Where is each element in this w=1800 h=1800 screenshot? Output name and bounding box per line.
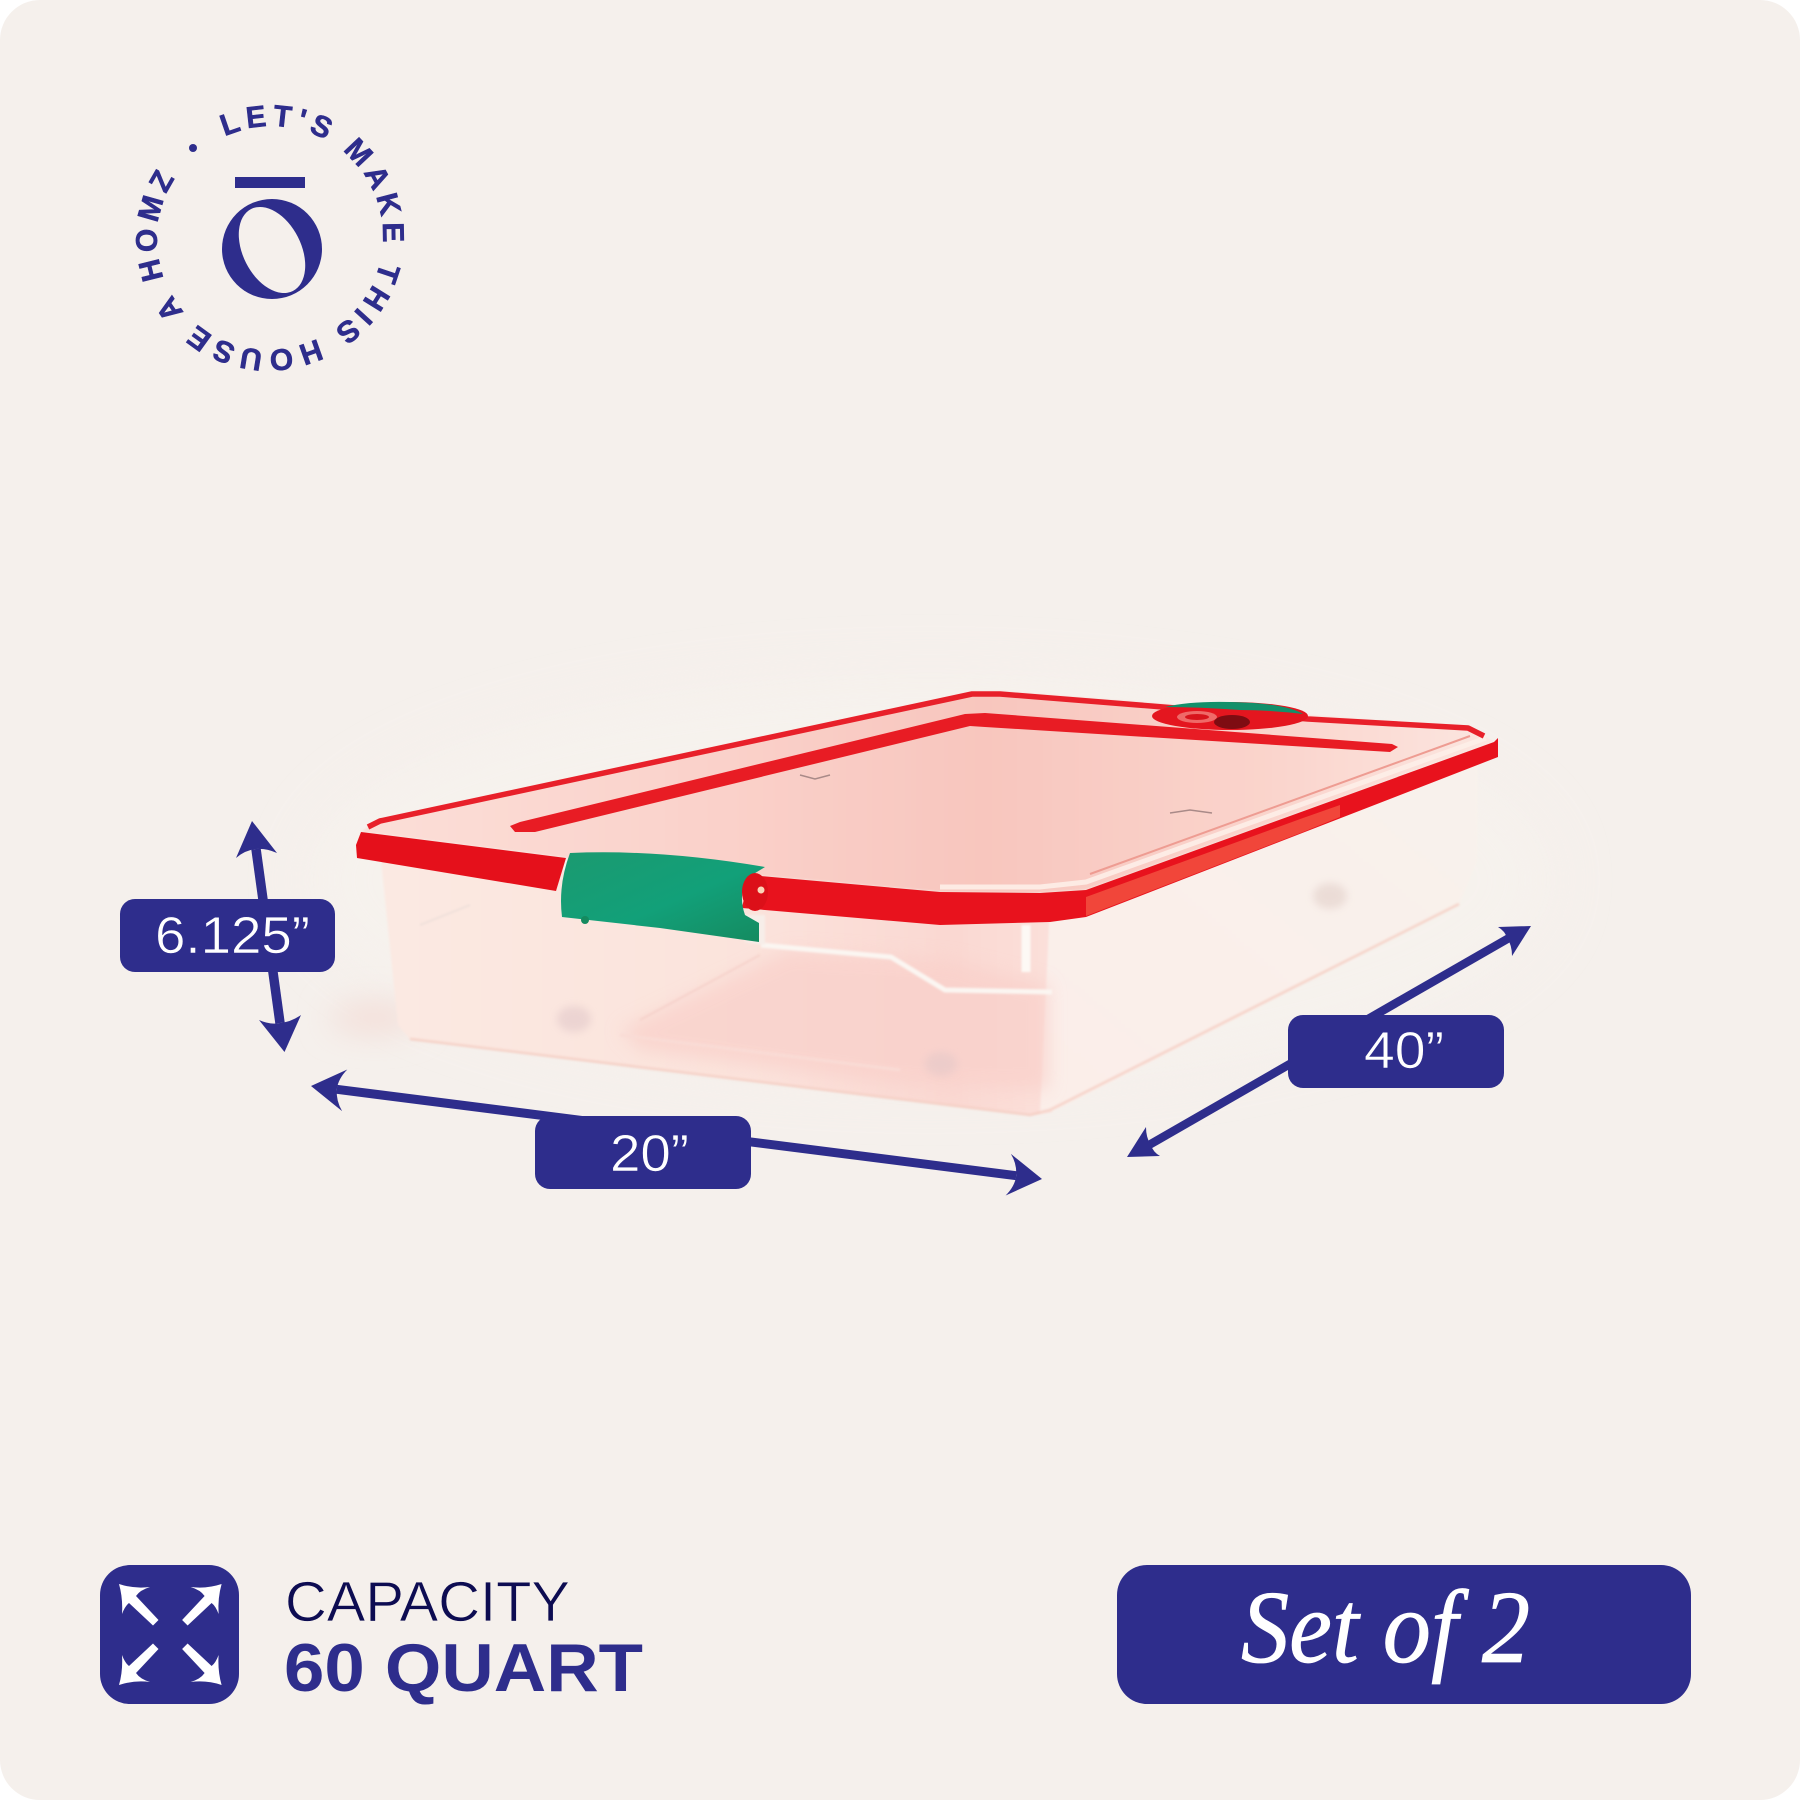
height label: [120, 899, 335, 972]
icon: expand arrows: [100, 1565, 239, 1704]
lid inner thin line: [1090, 736, 1470, 874]
dimension: height 6.125: [120, 821, 335, 1052]
height arrow: [236, 821, 301, 1052]
width label: [535, 1116, 751, 1189]
tub pink reflections: [420, 883, 1347, 1090]
logo: circular slogan: LET'S MAKE THIS HOUSE A HOMZ: [136, 104, 404, 371]
lid inner groove: [510, 713, 1398, 832]
lid knob: [1152, 702, 1308, 730]
depth arrow: [1127, 926, 1531, 1157]
width label: 20”: [610, 1125, 689, 1183]
product photo: storage box: [310, 680, 1550, 1115]
rim highlight: [1086, 805, 1340, 916]
set of 2 badge: Set of 2: [1241, 1570, 1530, 1685]
logo badge: [136, 104, 404, 371]
capacity value: 60 QUART: [284, 1630, 643, 1706]
logo: o with macron mark: [222, 177, 322, 304]
tub bottom edge: [410, 904, 1459, 1115]
set of 2 badge: [1117, 1565, 1691, 1704]
width arrow: [311, 1070, 1042, 1196]
soft halo and shadow: [310, 680, 1550, 1080]
dimension: depth 40: [1127, 926, 1531, 1157]
lid small marks: [800, 775, 1212, 813]
depth label: 40”: [1364, 1022, 1444, 1080]
dimension: width 20: [311, 1070, 1042, 1196]
tub side face: [1040, 750, 1478, 1114]
tub front face: [381, 860, 1052, 1115]
front rim right segment: [742, 738, 1498, 925]
capacity block: [100, 1565, 643, 1706]
lid pale band: [940, 738, 1486, 887]
handle highlight: [745, 915, 1052, 992]
depth label: [1288, 1015, 1504, 1088]
lid surface: [361, 692, 1494, 893]
front rim left segment: [356, 832, 566, 891]
green latch: [561, 852, 768, 942]
lid outer red line: [368, 694, 1484, 827]
height label: 6.125”: [155, 907, 310, 965]
capacity label: CAPACITY: [285, 1570, 570, 1634]
